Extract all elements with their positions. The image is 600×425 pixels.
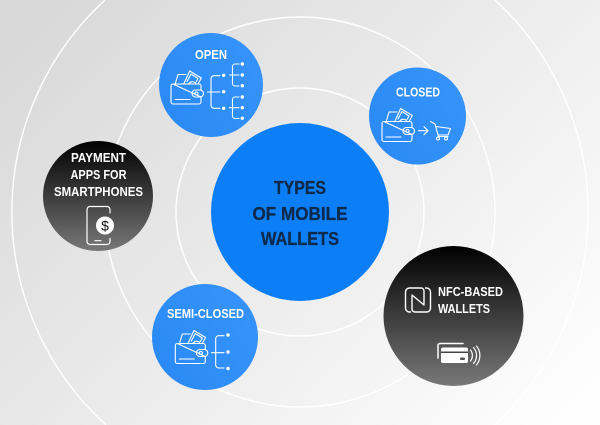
panel: closed bbox=[369, 68, 466, 164]
icon: closed wallet bbox=[382, 108, 414, 142]
icon: arrow bbox=[418, 127, 428, 135]
payment label: PAYMENT bbox=[71, 151, 126, 165]
payment label: APPS FOR bbox=[70, 168, 126, 182]
icon: semi-closed wallet bbox=[175, 330, 208, 364]
nfc label bbox=[438, 285, 503, 316]
nfc label: WALLETS bbox=[438, 302, 490, 316]
icon: shopping cart bbox=[430, 122, 450, 140]
panel: semi-closed bbox=[152, 284, 258, 390]
center heading: TYPES bbox=[274, 178, 326, 198]
panel: payment apps for smartphones bbox=[43, 141, 153, 251]
panel: open bbox=[159, 33, 263, 137]
icon: open distribution tree bbox=[208, 62, 244, 120]
center heading: OF MOBILE bbox=[252, 204, 348, 224]
icon: semi-closed distribution tree bbox=[212, 333, 230, 370]
nfc label: NFC-BASED bbox=[438, 285, 503, 299]
icon: open wallet bbox=[171, 71, 204, 104]
semi-closed label: SEMI-CLOSED bbox=[167, 307, 244, 321]
center heading bbox=[252, 178, 348, 249]
center heading: WALLETS bbox=[261, 229, 339, 249]
open label: OPEN bbox=[195, 48, 227, 62]
payment label: SMARTPHONES bbox=[54, 185, 143, 199]
payment label bbox=[54, 151, 143, 199]
panel: nfc-based wallets bbox=[384, 246, 524, 386]
center circle: types of mobile wallets bbox=[211, 123, 389, 301]
icon: contactless cards bbox=[438, 344, 480, 365]
icon: phone with dollar coin: $ bbox=[101, 218, 109, 234]
icon: nfc logo bbox=[406, 288, 430, 312]
closed label: CLOSED bbox=[396, 86, 440, 100]
